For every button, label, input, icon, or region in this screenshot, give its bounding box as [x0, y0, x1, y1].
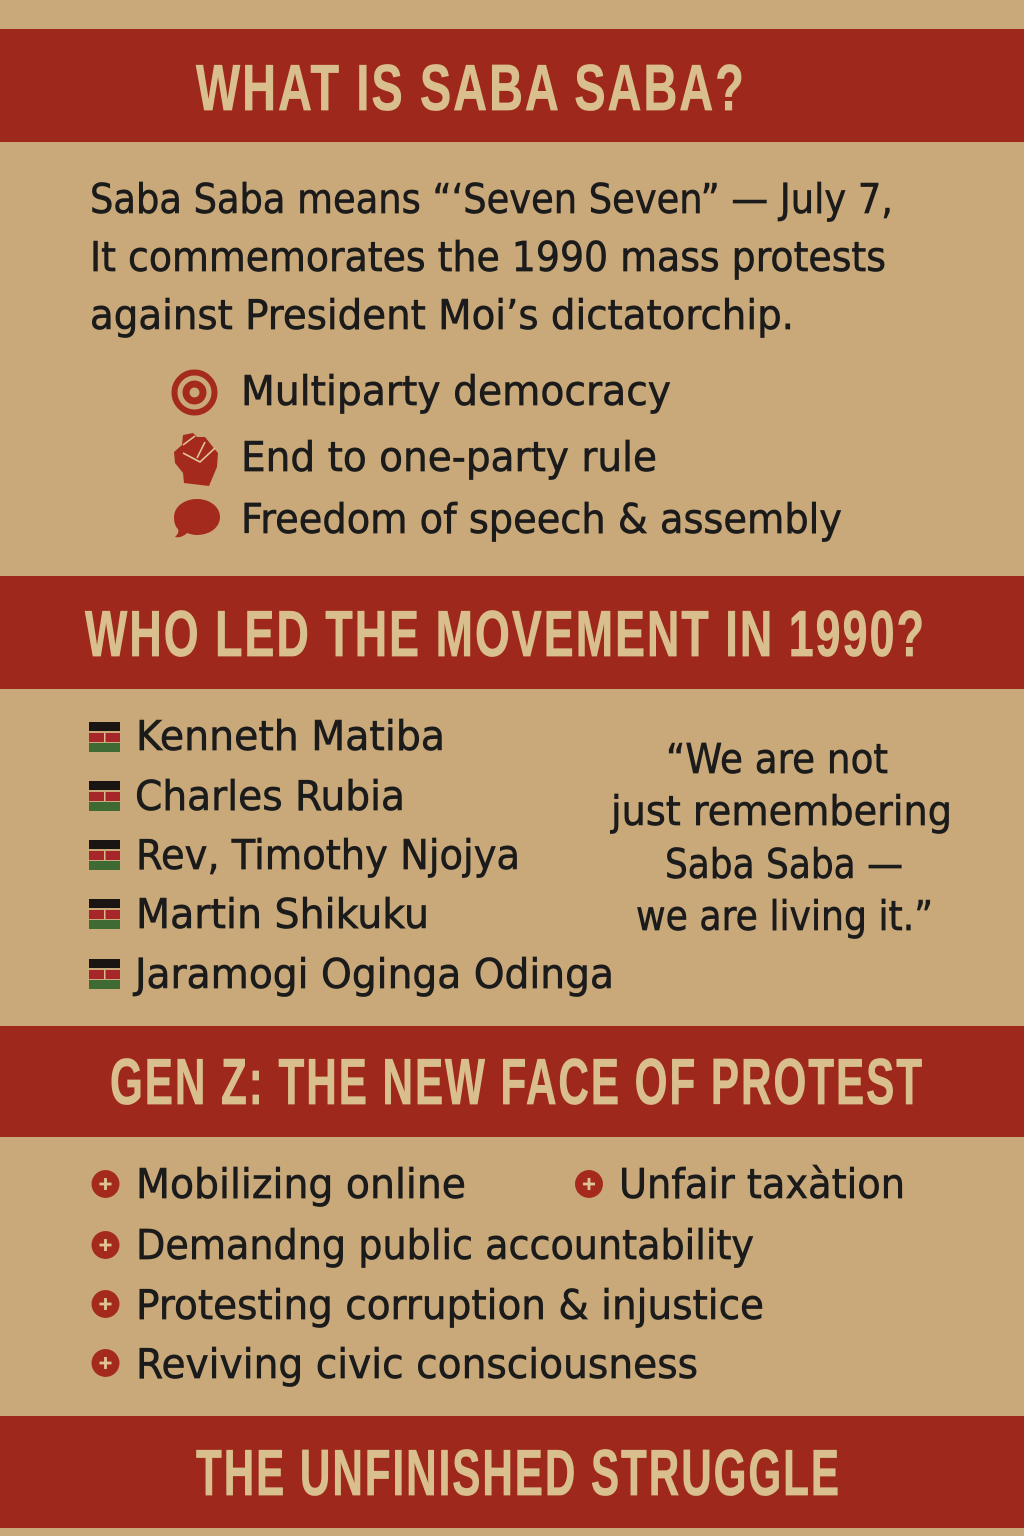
item: freedom of speech and assembly: Freedom of speech & assembly	[241, 495, 842, 543]
leader: Charles Rubia: Charles Rubia	[135, 772, 405, 820]
section 4: heading band: the unfinished struggle	[0, 1416, 1024, 1528]
icon: speech bubble	[174, 499, 220, 537]
heading band: what is saba saba: WHAT IS SABA SABA?	[196, 51, 746, 124]
item: demanding public accountability: Demandng public accountability	[136, 1221, 754, 1269]
section 3: gen z	[0, 1026, 1024, 1388]
heading band: gen z	[0, 1026, 1024, 1137]
quote: Saba Saba —	[665, 840, 903, 888]
leader: Jaramogi Oginga Odinga: Jaramogi Oginga Odinga	[132, 950, 614, 998]
section 2: who led the movement	[0, 576, 1024, 998]
quote: we are living it.”	[636, 892, 933, 940]
item: mobilizing online: Mobilizing online	[136, 1160, 466, 1208]
intro text: Saba Saba means “‘Seven Seven” — July 7,	[90, 175, 893, 223]
icon: target	[174, 372, 214, 412]
section 1: what is saba saba	[0, 29, 1024, 543]
item: unfair taxation: Unfair taxàtion	[619, 1160, 905, 1208]
leader: Rev, Timothy Njojya: Rev, Timothy Njojya	[136, 831, 520, 879]
intro text	[90, 175, 893, 339]
intro text: It commemorates the 1990 mass protests	[90, 233, 886, 281]
item: reviving civic consciousness: Reviving civic consciousness	[136, 1340, 698, 1388]
heading band: what is saba saba	[0, 29, 1024, 142]
item: protesting corruption: Protesting corruption & injustice	[136, 1281, 764, 1329]
leader: Martin Shikuku: Martin Shikuku	[136, 890, 429, 938]
item: multiparty democracy: Multiparty democracy	[241, 367, 671, 415]
heading band: who led the movement	[0, 576, 1024, 689]
quote: just remembering	[610, 787, 952, 835]
icon: raised fist	[174, 433, 218, 486]
quote	[610, 735, 952, 940]
quote: “We are not	[666, 735, 888, 783]
intro text: against President Moi’s dictatorchip.	[90, 291, 794, 339]
leader: Kenneth Matiba: Kenneth Matiba	[136, 712, 445, 760]
item: end to one-party rule: End to one-party rule	[241, 433, 657, 481]
